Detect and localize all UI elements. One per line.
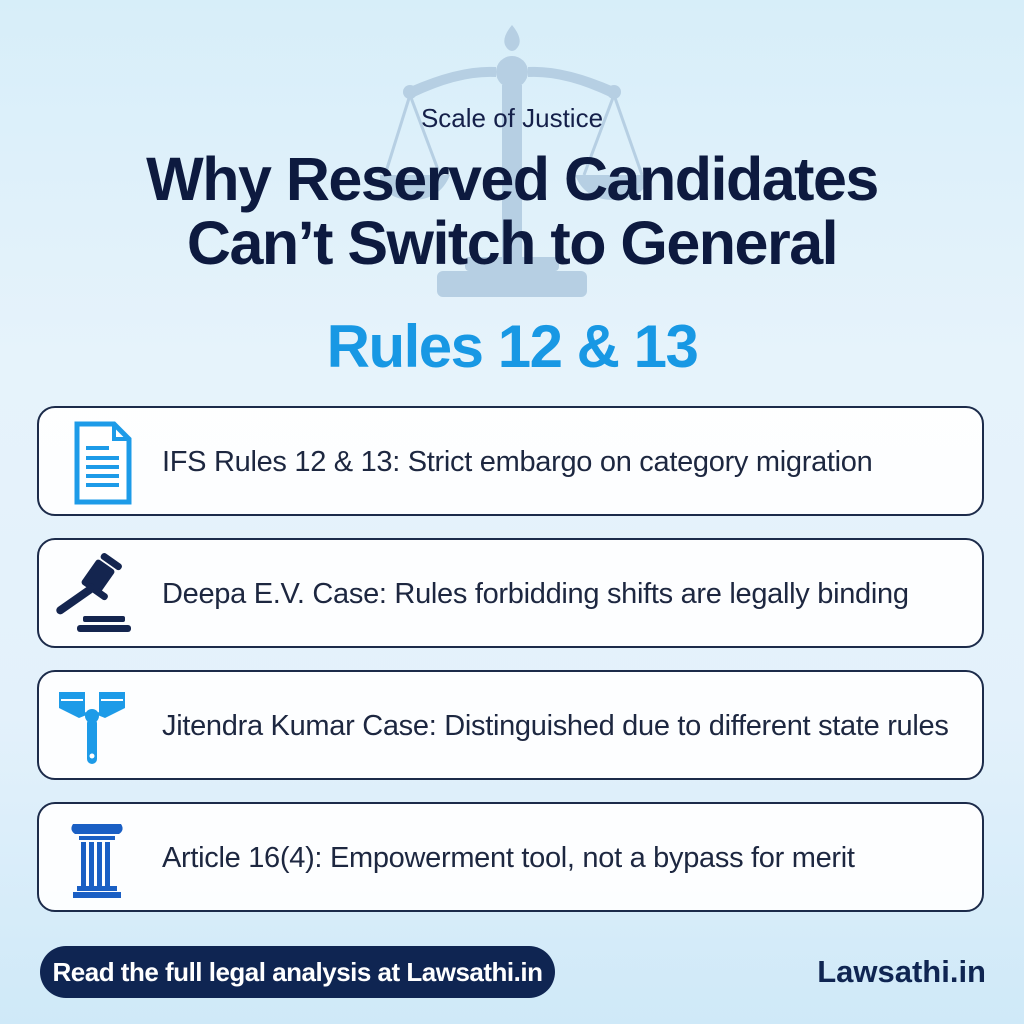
text: Jitendra Kumar Case: Distinguished due to different state rules	[162, 710, 949, 742]
brand: Lawsathi.in	[817, 954, 986, 989]
icon: pillar	[71, 824, 123, 898]
card 2	[37, 538, 984, 648]
card 4	[37, 802, 984, 912]
icon: blue scale stand	[59, 692, 125, 764]
heading: rules 12 & 13: Rules 12 & 13	[327, 313, 697, 380]
text: Article 16(4): Empowerment tool, not a bypass for merit	[162, 842, 855, 874]
title: Can’t Switch to General	[187, 209, 837, 277]
footer pill: Read the full legal analysis at Lawsathi.in	[52, 957, 542, 987]
footer pill	[40, 946, 555, 998]
text: IFS Rules 12 & 13: Strict embargo on category migration	[162, 446, 872, 478]
title	[146, 145, 878, 277]
icon: gavel	[56, 553, 131, 632]
card 1	[37, 406, 984, 516]
text: Deepa E.V. Case: Rules forbidding shifts are legally binding	[162, 578, 909, 610]
card 3	[37, 670, 984, 780]
background scale of justice	[380, 25, 644, 297]
icon: document	[74, 422, 132, 504]
subtitle: scale of justice: Scale of Justice	[421, 103, 603, 133]
title: Why Reserved Candidates	[146, 145, 878, 213]
